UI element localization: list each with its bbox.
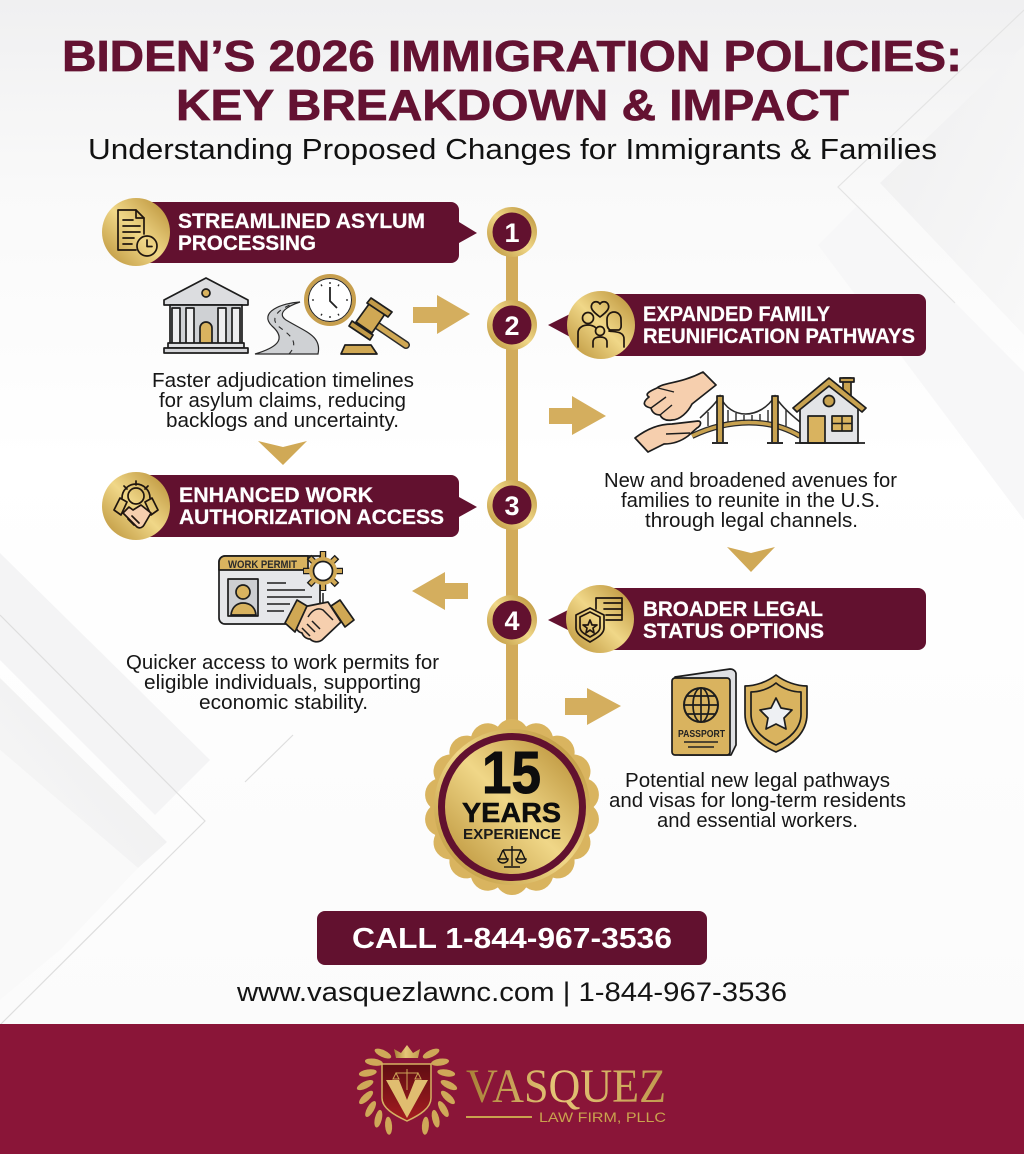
arrow: to passport <box>565 688 621 725</box>
icon: clasped hands <box>635 372 716 452</box>
icon: shield with V <box>382 1064 431 1121</box>
call to action button <box>317 911 707 965</box>
text: asylum description: Faster adjudication timelines <box>152 370 414 392</box>
title: BIDEN’S 2026 IMMIGRATION POLICIES: <box>62 32 962 81</box>
badge: 15 years experience <box>422 718 602 896</box>
illustration: work permit card <box>219 551 354 642</box>
icon: suspension bridge <box>692 396 800 443</box>
step 3 marker <box>487 480 537 530</box>
icon: crown <box>394 1045 420 1058</box>
text: asylum description: for asylum claims, reducing <box>159 390 406 412</box>
subtitle: Understanding Proposed Changes for Immigrants & Families <box>88 134 937 166</box>
step 4 marker: 4 <box>504 606 520 636</box>
illustration: hands, bridge and house <box>635 372 866 452</box>
icon: handshake and gear <box>114 481 158 528</box>
illustration: work permit card: WORK PERMIT <box>228 559 297 571</box>
logo: Vasquez Law Firm: VASQUEZ <box>466 1060 666 1113</box>
text: legal status description: and visas for long-term residents <box>609 790 906 812</box>
icon: courthouse <box>164 278 248 353</box>
banner 2: expanded family reunification: REUNIFICATION PATHWAYS <box>643 325 915 348</box>
call to action button: CALL 1-844-967-3536 <box>352 923 672 955</box>
illustration: passport and shield <box>672 669 807 755</box>
banner 1: streamlined asylum processing: PROCESSING <box>178 232 316 255</box>
icon: shield and flag <box>576 598 622 642</box>
banner 2: expanded family reunification: EXPANDED FAMILY <box>643 303 830 326</box>
arrow: to work permit <box>412 572 468 610</box>
footer band <box>0 1024 1024 1154</box>
icon: gavel <box>341 298 406 354</box>
icon: scales of justice <box>498 846 526 867</box>
icon: wall clock <box>306 276 354 324</box>
icon: winding road <box>255 302 319 354</box>
step 1 marker <box>487 207 537 257</box>
step 2 marker: 2 <box>504 311 520 341</box>
illustration: courthouse, road, clock, gavel <box>164 276 406 354</box>
icon: passport: PASSPORT <box>678 728 725 740</box>
badge: 15 years experience: 15 <box>482 740 541 806</box>
logo: Vasquez Law Firm: LAW FIRM, PLLC <box>539 1109 666 1125</box>
banner 2: expanded family reunification <box>548 291 926 359</box>
text: asylum description: backlogs and uncertainty. <box>166 410 399 432</box>
step 2 marker <box>487 300 537 350</box>
arrow: to family illustration <box>549 396 606 435</box>
text: legal status description <box>609 770 906 832</box>
banner 1: streamlined asylum processing: STREAMLINED ASYLUM <box>178 210 425 233</box>
icon: gear <box>303 551 343 603</box>
arrow: to step 2 <box>413 295 470 334</box>
text: legal status description: Potential new legal pathways <box>625 770 890 792</box>
text: asylum description <box>152 370 414 432</box>
icon: document and clock <box>118 210 157 256</box>
step 4 marker <box>487 595 537 645</box>
timeline spine <box>506 232 518 732</box>
text: work permit description <box>126 652 439 714</box>
banner 4: broader legal status: BROADER LEGAL <box>643 598 823 621</box>
banner 3: enhanced work authorization <box>102 472 477 540</box>
badge: 15 years experience: EXPERIENCE <box>463 826 561 843</box>
text: work permit description: economic stability. <box>199 692 368 714</box>
text: family description: families to reunite in the U.S. <box>621 490 880 512</box>
icon: star shield <box>745 675 807 752</box>
text: work permit description: eligible individuals, supporting <box>144 672 421 694</box>
step 1 marker: 1 <box>504 218 520 248</box>
icon: family with heart <box>578 302 624 347</box>
chevron: down to legal status <box>727 547 775 572</box>
icon: laurel wreath <box>355 1047 459 1135</box>
banner 1: streamlined asylum processing <box>102 198 477 266</box>
title: KEY BREAKDOWN & IMPACT <box>176 81 849 130</box>
logo: Vasquez Law Firm <box>355 1045 666 1135</box>
text: work permit description: Quicker access to work permits for <box>126 652 439 674</box>
text: family description <box>604 470 897 532</box>
text: family description: New and broadened avenues for <box>604 470 897 492</box>
text: legal status description: and essential workers. <box>657 810 858 832</box>
step 3 marker: 3 <box>504 491 520 521</box>
title <box>62 32 962 130</box>
chevron: down to work authorization <box>258 441 307 465</box>
badge: 15 years experience: YEARS <box>462 797 561 828</box>
icon: house <box>793 378 866 443</box>
contact line: www.vasquezlawnc.com | 1-844-967-3536 <box>236 977 787 1007</box>
icon: handshake <box>285 600 354 642</box>
text: family description: through legal channels. <box>645 510 858 532</box>
banner 4: broader legal status: STATUS OPTIONS <box>643 620 824 643</box>
banner 4: broader legal status <box>548 585 926 653</box>
banner 3: enhanced work authorization: AUTHORIZATION ACCESS <box>179 506 444 529</box>
banner 3: enhanced work authorization: ENHANCED WORK <box>179 484 373 507</box>
